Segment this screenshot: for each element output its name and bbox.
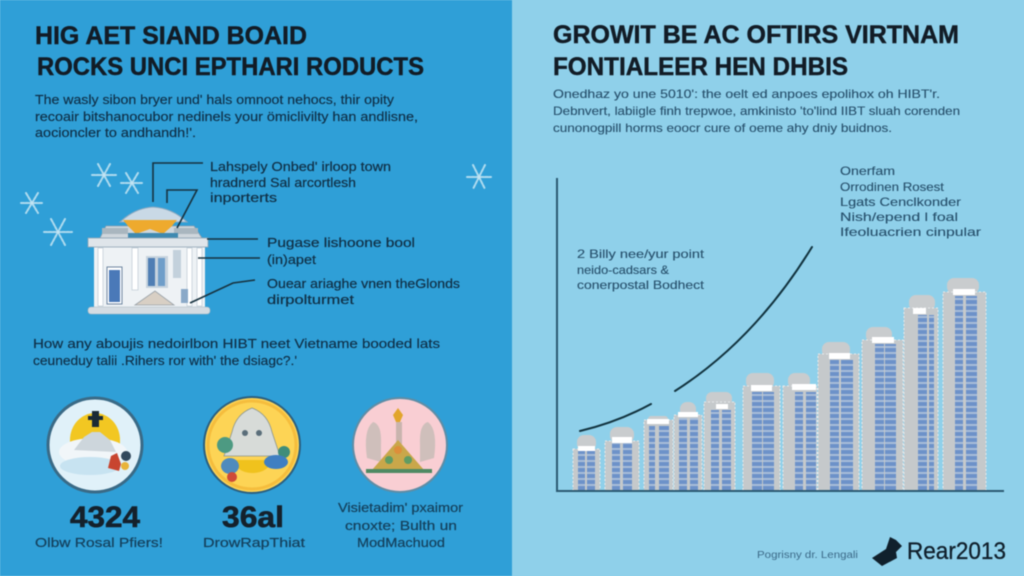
text block: chart note left: conerpostal Bodhect — [577, 278, 705, 292]
text block: stat one: Olbw Rosal Pfiers! — [35, 535, 163, 550]
tower 1 — [573, 435, 600, 491]
bar chart: tower buildings — [573, 278, 986, 491]
panel: right light-blue panel — [512, 0, 1024, 576]
heading: left title: HIG AET SIAND BOAID — [35, 22, 307, 50]
text block: chart note right: Nish/epend l foal — [840, 210, 958, 224]
text block: stat three: Visietadim' pxaimor — [338, 500, 464, 515]
text block: stat two: DrowRapThiat — [203, 535, 305, 550]
icon: bank building — [88, 207, 210, 314]
text block: left intro: The wasly sibon bryer und' hals omnoot nehocs, thir opity — [35, 93, 395, 107]
heading: left title: ROCKS UNCI EPTHARI RODUCTS — [37, 53, 424, 81]
arrow: leader lines — [153, 163, 260, 303]
heading: right title: FONTIALEER HEN DHBIS — [553, 53, 848, 81]
text block: stat one — [35, 501, 163, 550]
text block: building label three: dirpolturmet — [267, 293, 355, 307]
icon: footer logo — [872, 537, 902, 566]
text block: right intro: cunonogpill horms eoocr cure of oeme ahy dniy buidnos. — [553, 121, 892, 135]
text block: right intro — [553, 87, 960, 135]
text block: chart note right: Ifeoluacrien cinpular — [840, 225, 981, 239]
text block: building label two: (in)apet — [267, 253, 317, 267]
icon: medallion blue — [48, 398, 142, 492]
tower 3 — [644, 416, 673, 491]
heading: right title — [553, 21, 959, 81]
icon: medallion yellow — [204, 397, 300, 493]
text block: footer brand: Rear2013 — [907, 538, 1006, 565]
chart axes — [557, 178, 1004, 491]
text block: right intro: Debnvert, labiigle finh trepwoe, amkinisto 'to'lind IIBT sluah corenden — [553, 104, 960, 118]
text block: chart note right: Orrodinen Rosest — [840, 180, 945, 194]
text block: chart note right — [840, 164, 981, 239]
panel: left blue panel — [0, 0, 512, 576]
text block: stat two: 36al — [222, 501, 284, 534]
text block: stat three: ModMachuod — [357, 535, 445, 550]
tower 6 — [743, 373, 780, 491]
text block: chart note left: 2 Billy nee/yur point — [577, 247, 705, 261]
text block: building label one: inporterts — [210, 191, 277, 205]
text block: question: How any aboujis nedoirlbon HIBT neet Vietname booded lats — [33, 337, 440, 351]
text block: left intro — [35, 93, 418, 140]
arrow: growth curve — [580, 247, 812, 431]
text block: stat two — [203, 501, 305, 550]
text block: chart note left: neido-cadsars & — [577, 263, 669, 277]
text block: left intro: aocioncler to andhandh!'. — [35, 126, 196, 140]
text block: building label two — [267, 236, 415, 267]
text block: footer credit: Pogrisny dr. Lengali — [757, 550, 858, 561]
text block: building label two: Pugase lishoone bool — [267, 236, 415, 250]
tower 9 — [862, 327, 903, 491]
text block: building label three: Ouear ariaghe vnen theGlonds — [267, 277, 460, 291]
heading: left title — [35, 22, 424, 81]
text block: stat three: cnoxte; Bulth un — [345, 518, 457, 533]
icon: snowflake group — [21, 164, 491, 245]
heading: right title: GROWIT BE AC OFTIRS VIRTNAM — [553, 21, 959, 49]
text block: question: ceuneduy talii .Rihers ror with' the dsiagc?.' — [33, 354, 297, 368]
tower 4 — [674, 402, 702, 491]
text block: left intro: recoair bitshanocubor nedinels your ömiclivilty han andlisne, — [35, 110, 418, 124]
text block: building label three — [267, 277, 460, 307]
text block: building label one: Lahspely Onbed' irloop town — [210, 160, 391, 174]
tower 10 — [904, 295, 938, 491]
tower 8 — [818, 342, 859, 491]
text block: building label one — [210, 160, 391, 205]
tower 2 — [605, 427, 639, 491]
text block: chart note right: Lgats Cenclkonder — [840, 195, 961, 209]
tower 5 — [704, 392, 735, 491]
tower 7 — [783, 373, 817, 491]
text block: stat three — [338, 500, 464, 550]
text block: building label one: hradnerd Sal arcortlesh — [210, 176, 356, 190]
text block: chart note left — [577, 247, 705, 292]
text block: right intro: Onedhaz yo une 5010': the oelt ed anpoes epolihox oh HIBT'r. — [553, 87, 940, 101]
text block: stat one: 4324 — [70, 501, 140, 534]
text block: chart note right: Onerfam — [840, 164, 895, 178]
tower 11 — [943, 278, 986, 491]
text block: question — [33, 337, 440, 368]
icon: medallion pink — [353, 398, 447, 492]
